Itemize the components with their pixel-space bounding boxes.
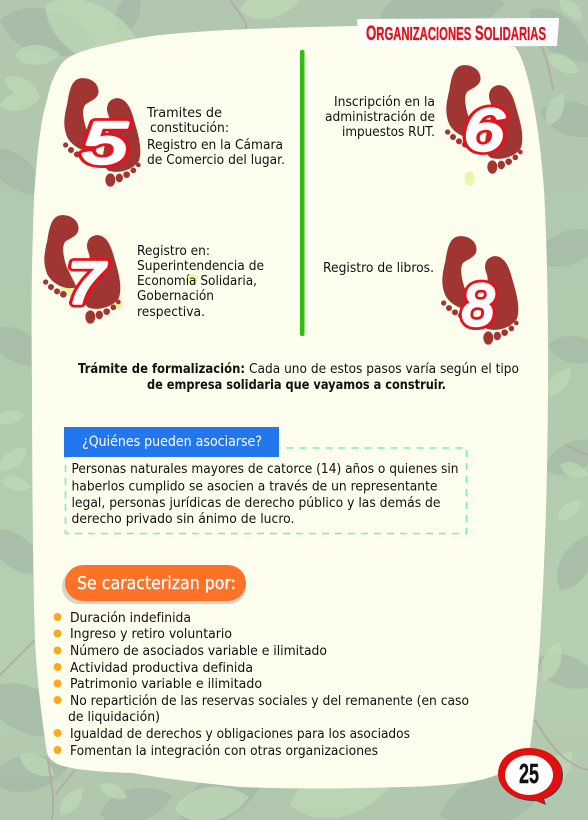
step 6 text: [325, 94, 435, 140]
characteristics list: Ingreso y retiro voluntario: [70, 626, 232, 642]
panel: who can join: haberlos cumplido se asocien a través de un representante: [72, 478, 438, 494]
step 7 text: Economía Solidaria,: [137, 273, 257, 289]
panel: who can join: derecho privado sin ánimo de lucro.: [72, 511, 294, 527]
step 5 text: Tramites de: [146, 105, 222, 121]
panel: who can join: [64, 427, 466, 534]
divider bar: [300, 50, 304, 336]
step 7 footprints: 7: [66, 251, 107, 316]
title banner: ORGANIZACIONES SOLIDARIAS: [366, 22, 546, 45]
characteristics list: Patrimonio variable e ilimitado: [70, 676, 262, 692]
title banner: [357, 18, 559, 47]
step 7 text: Registro en:: [137, 243, 210, 259]
characteristics list: Igualdad de derechos y obligaciones para los asociados: [70, 726, 410, 742]
panel: who can join: Personas naturales mayores de catorce (14) años o quienes sin: [72, 461, 458, 477]
characteristics list: Actividad productiva definida: [70, 660, 253, 676]
step 5 text: [146, 105, 285, 168]
characteristics list: Fomentan la integración con otras organizaciones: [70, 743, 378, 759]
heading: characteristics pill: [62, 565, 246, 604]
formalization note: [78, 361, 519, 393]
step 7 footprints: [43, 215, 123, 324]
step 8 footprints: 8: [462, 273, 494, 338]
step 5 text: Registro en la Cámara: [147, 137, 283, 153]
step 5 footprints: 5: [82, 111, 128, 176]
step 5 footprints: [63, 78, 141, 187]
step 6 text: administración de: [325, 109, 435, 125]
step 5 text: de Comercio del lugar.: [147, 152, 285, 168]
formalization note: Trámite de formalización:: [78, 361, 245, 377]
characteristics list: No repartición de las reservas sociales y del remanente (en caso: [70, 693, 469, 709]
step 6 footprints: 6: [464, 98, 505, 163]
characteristics list: de liquidación): [68, 709, 160, 725]
formalization note: Cada uno de estos pasos varía según el tipo: [249, 361, 519, 377]
step 7 footprints: 7: [66, 251, 107, 316]
step 8 footprints: [441, 236, 519, 345]
step 6 footprints: 6: [464, 98, 505, 163]
step 8 footprints: 8: [462, 273, 494, 338]
page number badge: [498, 748, 563, 805]
step 7 text: Gobernación: [137, 288, 214, 304]
step 6 footprints: [445, 65, 523, 174]
formalization note: de empresa solidaria que vayamos a construir.: [147, 377, 446, 393]
pale spot: [464, 171, 474, 186]
step 5 footprints: 5: [82, 111, 128, 176]
step 5 text: constitución:: [150, 120, 229, 136]
panel: who can join: legal, personas jurídicas de derecho público y las demás de: [72, 495, 440, 511]
heading: characteristics pill: Se caracterizan por:: [77, 573, 236, 594]
characteristics list: Duración indefinida: [70, 610, 191, 626]
page number badge: 25: [519, 758, 539, 789]
step 7 text: [137, 243, 264, 320]
step 7 text: Superintendencia de: [137, 258, 264, 274]
step 6 text: impuestos RUT.: [342, 124, 435, 140]
step 7 text: respectiva.: [137, 304, 205, 320]
step 8 text: Registro de libros.: [323, 260, 434, 276]
step 6 text: Inscripción en la: [334, 94, 435, 110]
characteristics list: [54, 610, 469, 759]
panel: who can join: ¿Quiénes pueden asociarse?: [82, 434, 262, 450]
characteristics list: Número de asociados variable e ilimitado: [70, 643, 327, 659]
